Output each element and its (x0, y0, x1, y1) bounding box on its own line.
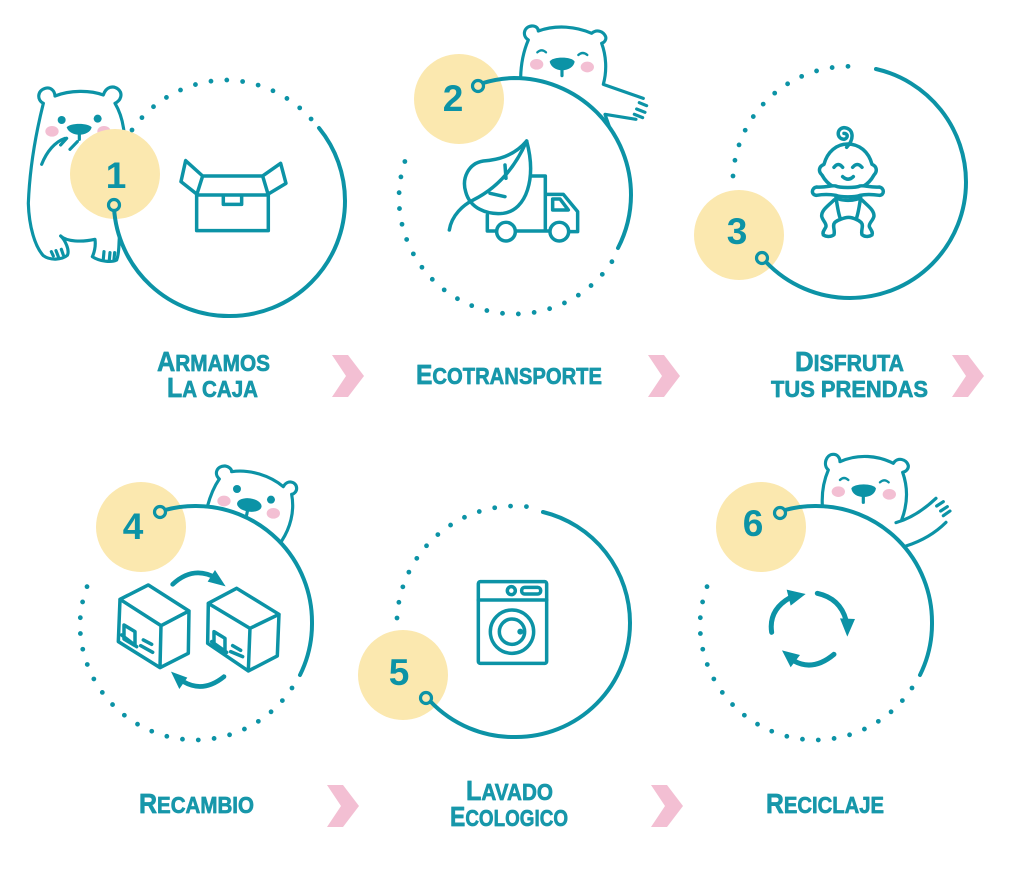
ring 5 (420, 692, 432, 704)
icon: washing machine (478, 582, 547, 663)
ring 2 (472, 80, 484, 92)
progress arc 1 (114, 128, 345, 316)
label: recambio: RECAMBIO (139, 788, 254, 819)
progress arc 6 (785, 506, 932, 675)
number 4: 4 (123, 506, 144, 547)
progress arc 3 (766, 69, 966, 298)
icon: leaf and truck (449, 141, 578, 241)
icon: box (181, 161, 286, 231)
badge 4 (96, 482, 186, 572)
icon: exchange boxes (118, 570, 279, 689)
number 1: 1 (106, 155, 126, 196)
number 2: 2 (443, 78, 463, 119)
ring 4 (154, 506, 166, 518)
dotted arc 4 (80, 575, 292, 740)
progress arc 4 (165, 506, 312, 675)
dotted arc 5 (397, 506, 530, 618)
number 3: 3 (727, 211, 747, 252)
dotted arc 6 (700, 575, 912, 740)
dotted arc 1 (132, 80, 312, 130)
badge 1 (70, 129, 160, 219)
label: armamos la caja (157, 346, 270, 403)
number 6: 6 (743, 503, 763, 544)
icon: recycle arrows (771, 590, 855, 667)
label: disfruta tus prendas: TUS PRENDAS (771, 376, 928, 402)
label: lavado ecologico (450, 775, 568, 832)
step 2: ecotransporte (399, 26, 647, 314)
label: disfruta tus prendas: DISFRUTA (795, 346, 904, 377)
bear 4 (207, 466, 297, 541)
label: armamos la caja: ARMAMOS (157, 346, 270, 377)
arrow: chevron 4 (327, 785, 359, 827)
ring 1 (108, 200, 120, 210)
arrow: chevron 1 (332, 355, 364, 397)
label: ecotransporte: ECOTRANSPORTE (416, 359, 602, 390)
label: reciclaje: RECICLAJE (766, 788, 884, 819)
bear 6 (822, 454, 950, 546)
step 3: disfruta tus prendas (694, 66, 966, 298)
number 5: 5 (389, 652, 409, 693)
badge 5 (358, 630, 448, 720)
label: armamos la caja: LA CAJA (167, 372, 258, 403)
label: lavado ecologico: ECOLOGICO (450, 801, 568, 832)
step 6: reciclaje (700, 454, 950, 740)
arrow: chevron 3 (952, 355, 984, 397)
step 5: lavado ecologico (358, 506, 630, 737)
step 1: armamos la caja (28, 80, 345, 316)
badge 2 (414, 54, 504, 144)
ring 6 (774, 508, 786, 518)
badge 6 (716, 482, 806, 572)
dotted arc 2 (399, 148, 612, 314)
arrow: chevron 2 (648, 355, 680, 397)
step 4: recambio (80, 466, 312, 740)
arrow: chevron 5 (651, 785, 683, 827)
progress arc 5 (430, 512, 630, 737)
label: disfruta tus prendas (771, 346, 928, 402)
progress arc 2 (483, 78, 631, 248)
icon: baby (812, 128, 883, 236)
badge 3 (694, 190, 784, 280)
ring 3 (756, 252, 768, 264)
label: lavado ecologico: LAVADO (466, 775, 553, 806)
bear 1 (28, 87, 124, 261)
bear 2 (521, 26, 647, 128)
dotted arc 3 (733, 66, 861, 176)
